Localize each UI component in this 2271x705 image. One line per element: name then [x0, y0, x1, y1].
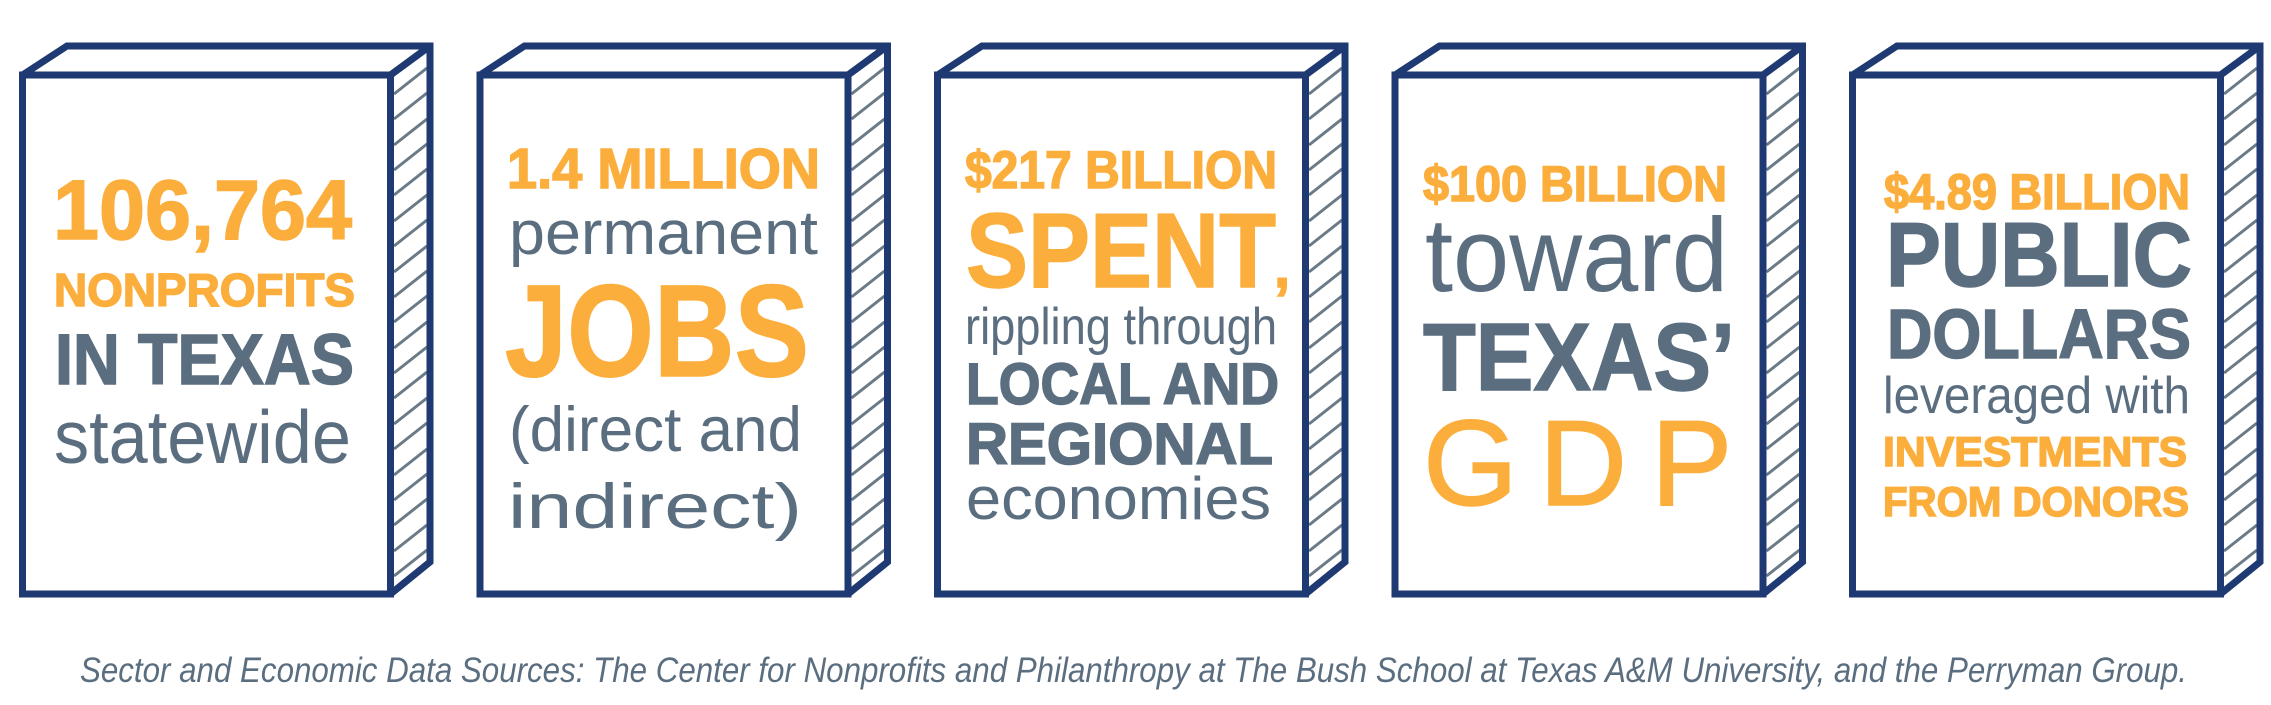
- label: REGIONAL: REGIONAL: [966, 412, 1273, 477]
- label: FROM DONORS: FROM DONORS: [1883, 478, 2189, 525]
- label: IN TEXAS: IN TEXAS: [55, 321, 354, 400]
- panel: billion spent: [938, 46, 1345, 594]
- stat: $4.89 BILLION: $4.89 BILLION: [1884, 164, 2190, 220]
- label: DOLLARS: DOLLARS: [1887, 295, 2191, 373]
- label: INVESTMENTS: INVESTMENTS: [1883, 428, 2187, 475]
- label: toward: toward: [1425, 197, 1728, 314]
- label: LOCAL AND: LOCAL AND: [966, 352, 1279, 417]
- label: leveraged with: leveraged with: [1883, 367, 2190, 425]
- label: TEXAS': TEXAS’: [1423, 304, 1735, 411]
- stat: 106,764: 106,764: [53, 163, 352, 257]
- panel: permanent jobs: [480, 46, 888, 594]
- box outline 4: [1395, 46, 1802, 594]
- panel: public dollars: [1852, 46, 2260, 594]
- label: comma: ,: [1274, 235, 1290, 300]
- label: rippling through: rippling through: [965, 298, 1277, 356]
- box outline 3: [938, 46, 1345, 594]
- label: permanent: permanent: [509, 199, 818, 268]
- label: NONPROFITS: NONPROFITS: [54, 264, 355, 316]
- stat: $100 BILLION: $100 BILLION: [1423, 156, 1727, 212]
- label: PUBLIC: PUBLIC: [1886, 205, 2192, 306]
- box outline 1: [22, 46, 430, 594]
- label: SPENT: SPENT: [966, 192, 1276, 310]
- label: JOBS: JOBS: [505, 257, 809, 404]
- label: economies: economies: [966, 465, 1271, 532]
- box outline 2: [480, 46, 888, 594]
- stat: $217 BILLION: $217 BILLION: [965, 141, 1277, 200]
- label: direct and: (direct and: [509, 395, 802, 465]
- label: statewide: statewide: [54, 395, 351, 479]
- label: indirect: indirect): [508, 472, 802, 542]
- box outline 5: [1852, 46, 2260, 594]
- panel: GDP contribution: [1395, 46, 1802, 594]
- panel: nonprofits in Texas: [22, 46, 430, 594]
- stat: 1.4 MILLION: 1.4 MILLION: [507, 137, 820, 201]
- label: GDP: GDP: [1423, 395, 1732, 531]
